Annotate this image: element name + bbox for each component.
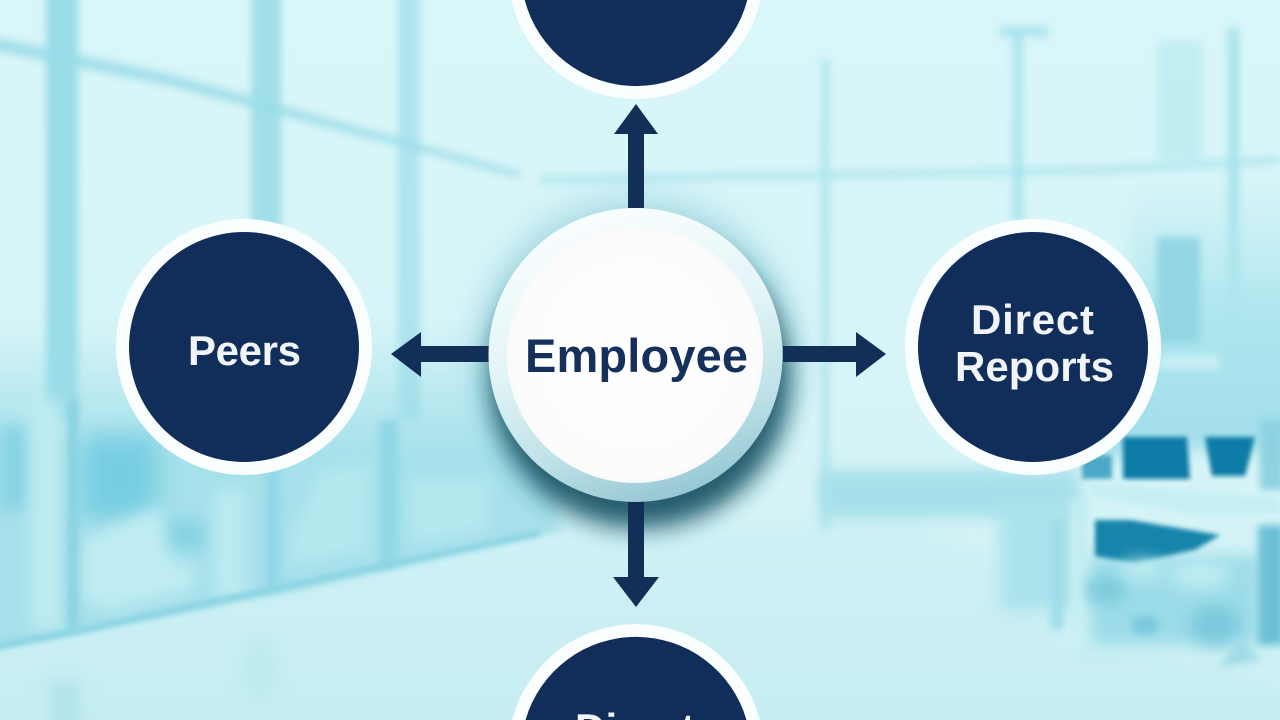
halo around center (471, 190, 801, 520)
window frames on the left (0, 0, 520, 430)
blurred chairs under the table (1050, 500, 1241, 645)
conference table and chairs (1082, 420, 1280, 668)
node: Peers (116, 219, 372, 475)
arrow: down (613, 500, 659, 607)
arrow: up (614, 104, 658, 208)
shadow under center node (490, 228, 790, 528)
node: bottom, cropped (512, 624, 760, 720)
blurred skyline patches at lower left (0, 400, 490, 640)
node: Direct Reports: Reports (955, 343, 1114, 390)
node: Direct Reports: Direct (971, 296, 1094, 343)
center node: Employee: Employee (525, 329, 748, 382)
node: Direct Reports (905, 219, 1161, 475)
center node: Employee (488, 208, 782, 502)
arrow: right (783, 332, 886, 377)
right side mullions and horizontal beam (540, 27, 1280, 530)
node: top, cropped (511, 0, 761, 99)
right room block (1130, 180, 1280, 450)
node: Peers: Peers (188, 327, 301, 374)
floor (0, 515, 1280, 720)
floor line and reflections (0, 530, 540, 720)
arrow: left (391, 332, 490, 377)
window wall lower left (0, 320, 560, 660)
room band behind the table (820, 385, 1260, 645)
